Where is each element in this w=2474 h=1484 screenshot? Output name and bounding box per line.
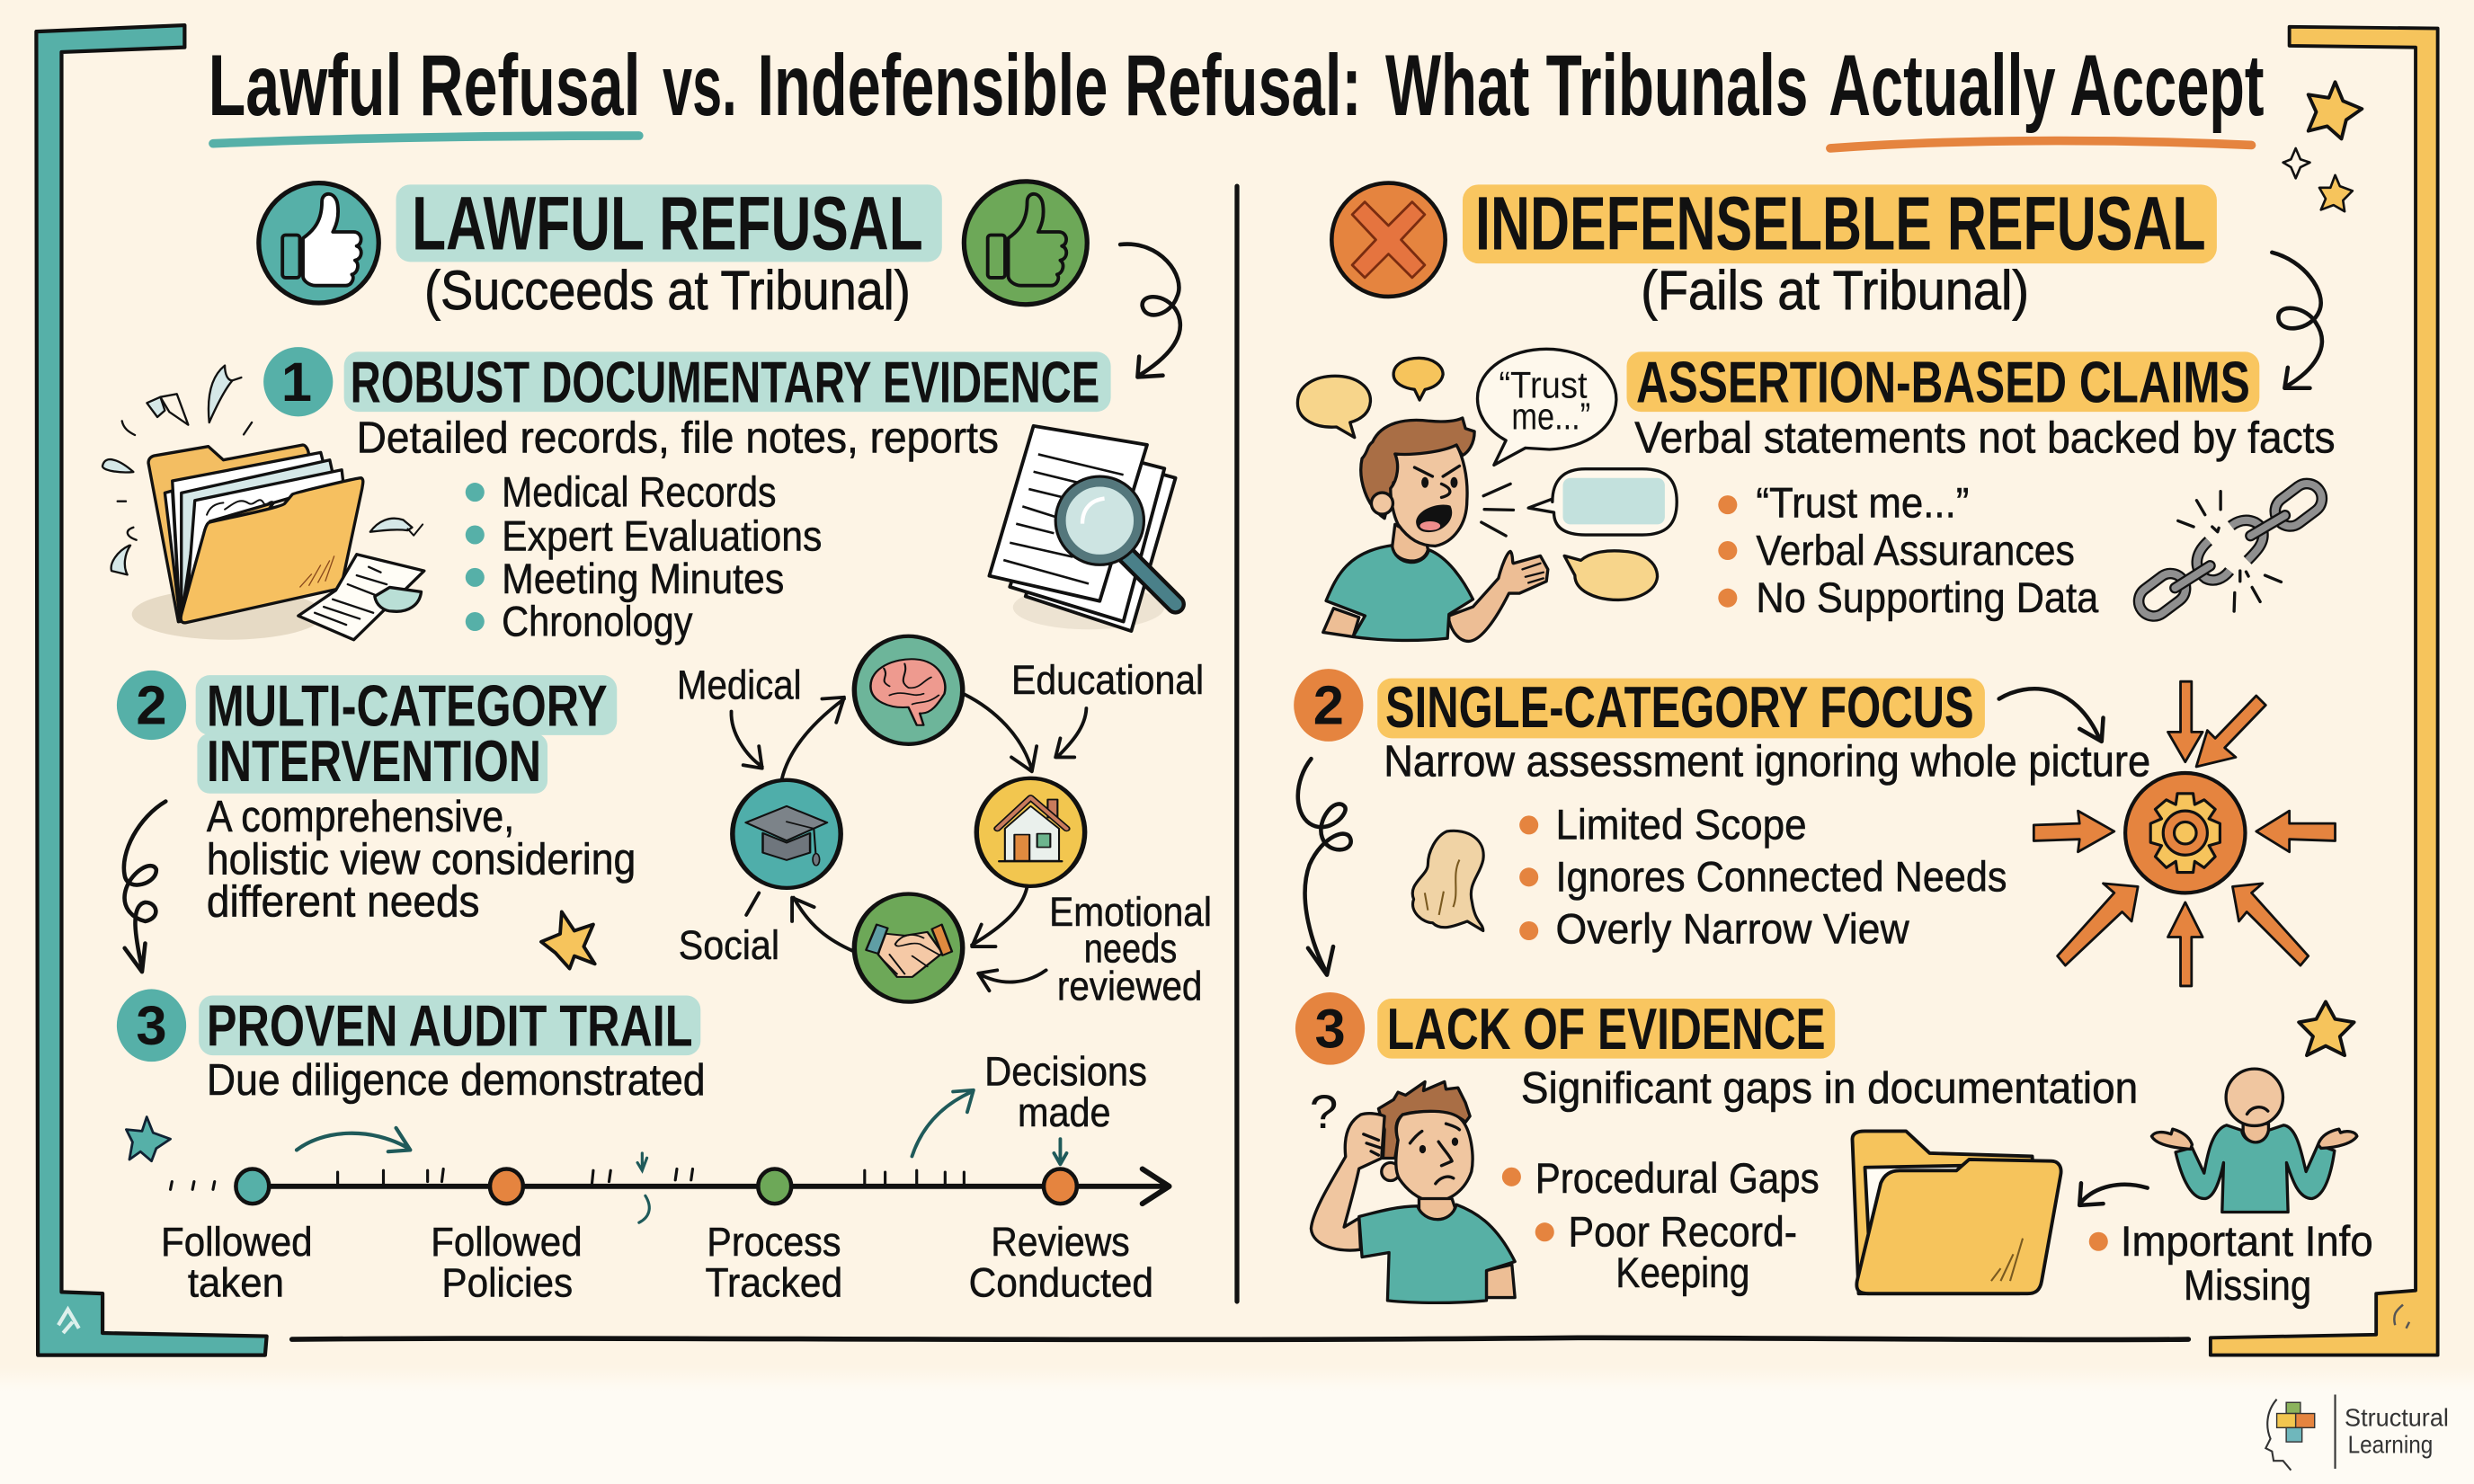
number badge 2 (1294, 669, 1363, 742)
labels: cycle: Medical (677, 662, 802, 707)
list: procedural gaps: Poor Record- (1569, 1209, 1797, 1257)
list: important info missing (2089, 1218, 2373, 1310)
heading: proven audit trail: PROVEN AUDIT TRAIL (207, 993, 692, 1059)
list: procedural gaps: Keeping (1615, 1249, 1749, 1297)
labels: cycle (677, 657, 1212, 1009)
heading: lawful refusal: LAWFUL REFUSAL (412, 181, 923, 265)
timeline labels: Followed (161, 1219, 313, 1265)
illustration: angry man with speech bubbles (1297, 349, 1677, 641)
labels: cycle: Social (679, 922, 779, 968)
timeline labels: Policies (441, 1260, 573, 1306)
timeline labels: Process (707, 1219, 841, 1265)
decorative outline star (2299, 1001, 2354, 1055)
decorative stars top right (2283, 82, 2362, 211)
heading: multi-category intervention: INTERVENTION (207, 728, 541, 794)
list: limited scope: Ignores Connected Needs (1556, 854, 2007, 902)
timeline labels: Tracked (706, 1260, 842, 1306)
labels: cycle: needs (1084, 926, 1177, 972)
logo text: Structural (2345, 1404, 2449, 1432)
section 2: multi-category intervention (117, 636, 1212, 1009)
text: due diligence: Due diligence demonstrated (207, 1056, 706, 1105)
illustration: shrugging person (2151, 1069, 2357, 1213)
arrow: person to folder (2079, 1183, 2148, 1205)
icon: gear with converging arrows (2033, 681, 2336, 986)
labels: cycle: Emotional (1049, 889, 1212, 935)
speech bubble text: trust me (1499, 363, 1590, 437)
text: holistic view: A comprehensive, (207, 793, 514, 841)
section 1: robust documentary evidence (102, 347, 1176, 645)
icons: cycle nodes (733, 636, 1085, 1002)
number badge 2: 2 (136, 675, 167, 737)
heading: robust documentary evidence: ROBUST DOCUMENTARY EVIDENCE (351, 350, 1099, 415)
icon: teal thumbs up (259, 183, 378, 303)
text: detailed records: Detailed records, file notes, reports (357, 414, 999, 463)
decorative teal star (126, 1117, 171, 1161)
converging arrows (2033, 681, 2336, 986)
heading: single-category focus: SINGLE-CATEGORY FOCUS (1385, 674, 1974, 740)
section 2: single-category focus (1294, 669, 2336, 986)
section 3: proven audit trail (117, 989, 1170, 1306)
title: Actually Accept (1829, 38, 2265, 134)
number badge 3: 3 (136, 995, 167, 1057)
heading: assertion-based claims: ASSERTION-BASED CLAIMS (1636, 350, 2250, 415)
icon: green thumbs up (964, 182, 1087, 305)
node: graduation cap (733, 780, 841, 888)
node: brain (854, 636, 963, 744)
chart: timeline (161, 1153, 1170, 1306)
illustration: worried man (1311, 1081, 1515, 1302)
timeline labels: Followed (431, 1219, 583, 1265)
number badge 1 (263, 347, 333, 416)
number badge 3 (1295, 992, 1365, 1065)
timeline labels: Conducted (969, 1260, 1153, 1306)
timeline labels (161, 1219, 1153, 1306)
section 3: lack of evidence (1295, 992, 2373, 1310)
panel: lawful refusal (102, 181, 1212, 1306)
heading: multi-category intervention (196, 672, 617, 794)
arrow: squiggle to section 3 (1298, 759, 1351, 975)
labels: cycle: Educational (1011, 657, 1204, 703)
list: evidence types: Expert Evaluations (502, 513, 822, 561)
icon: broken chain (2132, 477, 2327, 622)
logo text (2345, 1404, 2449, 1458)
number badge 3 (117, 989, 186, 1062)
section 1: assertion-based claims (1297, 349, 2336, 641)
arrow: teal curve (297, 1128, 410, 1151)
text: holistic view: holistic view considering (207, 835, 636, 884)
number badge 3: 3 (1314, 998, 1346, 1060)
list: limited scope (1519, 802, 2007, 954)
speech bubble text: trust me: “Trust (1499, 363, 1588, 405)
list: procedural gaps (1502, 1155, 1820, 1297)
title: vs. (663, 38, 737, 134)
arrow: squiggle to robust evidence (1120, 244, 1180, 377)
icon: isolated puzzle fragment (1412, 831, 1483, 930)
list: important info missing: Important Info (2121, 1218, 2373, 1266)
title: Lawful Refusal (209, 38, 641, 134)
subheading: fails at tribunal: (Fails at Tribunal) (1641, 260, 2029, 322)
heading: lack of evidence: LACK OF EVIDENCE (1387, 996, 1826, 1062)
logo text: Learning (2348, 1430, 2433, 1458)
list: verbal claims: “Trust me...” (1756, 480, 1969, 528)
list: verbal claims: Verbal Assurances (1756, 527, 2075, 574)
timeline labels: taken (188, 1260, 284, 1306)
callout: decisions made (912, 1048, 1147, 1164)
timeline labels: Reviews (991, 1219, 1130, 1265)
list: procedural gaps: Procedural Gaps (1535, 1155, 1820, 1203)
list: important info missing: Missing (2184, 1262, 2311, 1310)
arrow: squiggle to assertion claims (2272, 253, 2322, 388)
text: verbal statements: Verbal statements not backed by facts (1634, 414, 2336, 463)
title: What Tribunals (1385, 38, 1808, 134)
heading: indefenselble refusal: INDEFENSELBLE REFUSAL (1475, 181, 2206, 265)
list: limited scope: Overly Narrow View (1556, 906, 1909, 954)
decorative star (541, 911, 595, 969)
list: evidence types: Meeting Minutes (502, 555, 784, 603)
number badge 1: 1 (281, 351, 312, 413)
logo icon (2265, 1400, 2315, 1471)
node: handshake (854, 894, 963, 1002)
number badge 2: 2 (1313, 675, 1344, 737)
text: narrow assessment: Narrow assessment ignoring whole picture (1384, 737, 2150, 786)
icon: empty folder (1852, 1131, 2061, 1293)
list: verbal claims (1718, 480, 2099, 622)
callout: decisions made: Decisions (984, 1048, 1147, 1094)
icon: open folder with papers (102, 366, 424, 640)
arrow: squiggle to section 3 (124, 802, 165, 972)
list: evidence types: Chronology (502, 598, 693, 645)
logo: structural learning (2265, 1394, 2449, 1471)
frame: teal left bracket (36, 25, 267, 1355)
speech bubble text: trust me: me...” (1511, 395, 1590, 437)
text: holistic view: different needs (207, 878, 480, 927)
diagram: needs cycle (677, 636, 1212, 1009)
frame: yellow right bracket (2211, 27, 2438, 1355)
node: house (976, 778, 1085, 886)
list: evidence types (466, 468, 822, 645)
list: limited scope: Limited Scope (1556, 802, 1807, 849)
number badge 2 (117, 671, 186, 740)
arrow: curved to gear (1999, 689, 2104, 742)
arrows: cycle (731, 694, 1086, 991)
text: holistic view (207, 793, 636, 927)
icon: red x (1331, 183, 1446, 297)
heading: multi-category intervention: MULTI-CATEGORY (207, 672, 608, 738)
title (209, 38, 2265, 148)
icon: documents with magnifying glass (989, 426, 1176, 631)
mark: question mark: ? (1310, 1086, 1338, 1139)
labels: cycle: reviewed (1057, 964, 1202, 1009)
text: significant gaps: Significant gaps in documentation (1521, 1064, 2138, 1113)
title: Indefensible Refusal: (757, 38, 1362, 134)
panel: indefensible refusal (1294, 181, 2373, 1310)
callout: decisions made: made (1018, 1089, 1111, 1135)
list: evidence types: Medical Records (502, 468, 777, 516)
subheading: succeeds at tribunal: (Succeeds at Tribunal) (424, 260, 911, 322)
list: verbal claims: No Supporting Data (1756, 574, 2099, 622)
